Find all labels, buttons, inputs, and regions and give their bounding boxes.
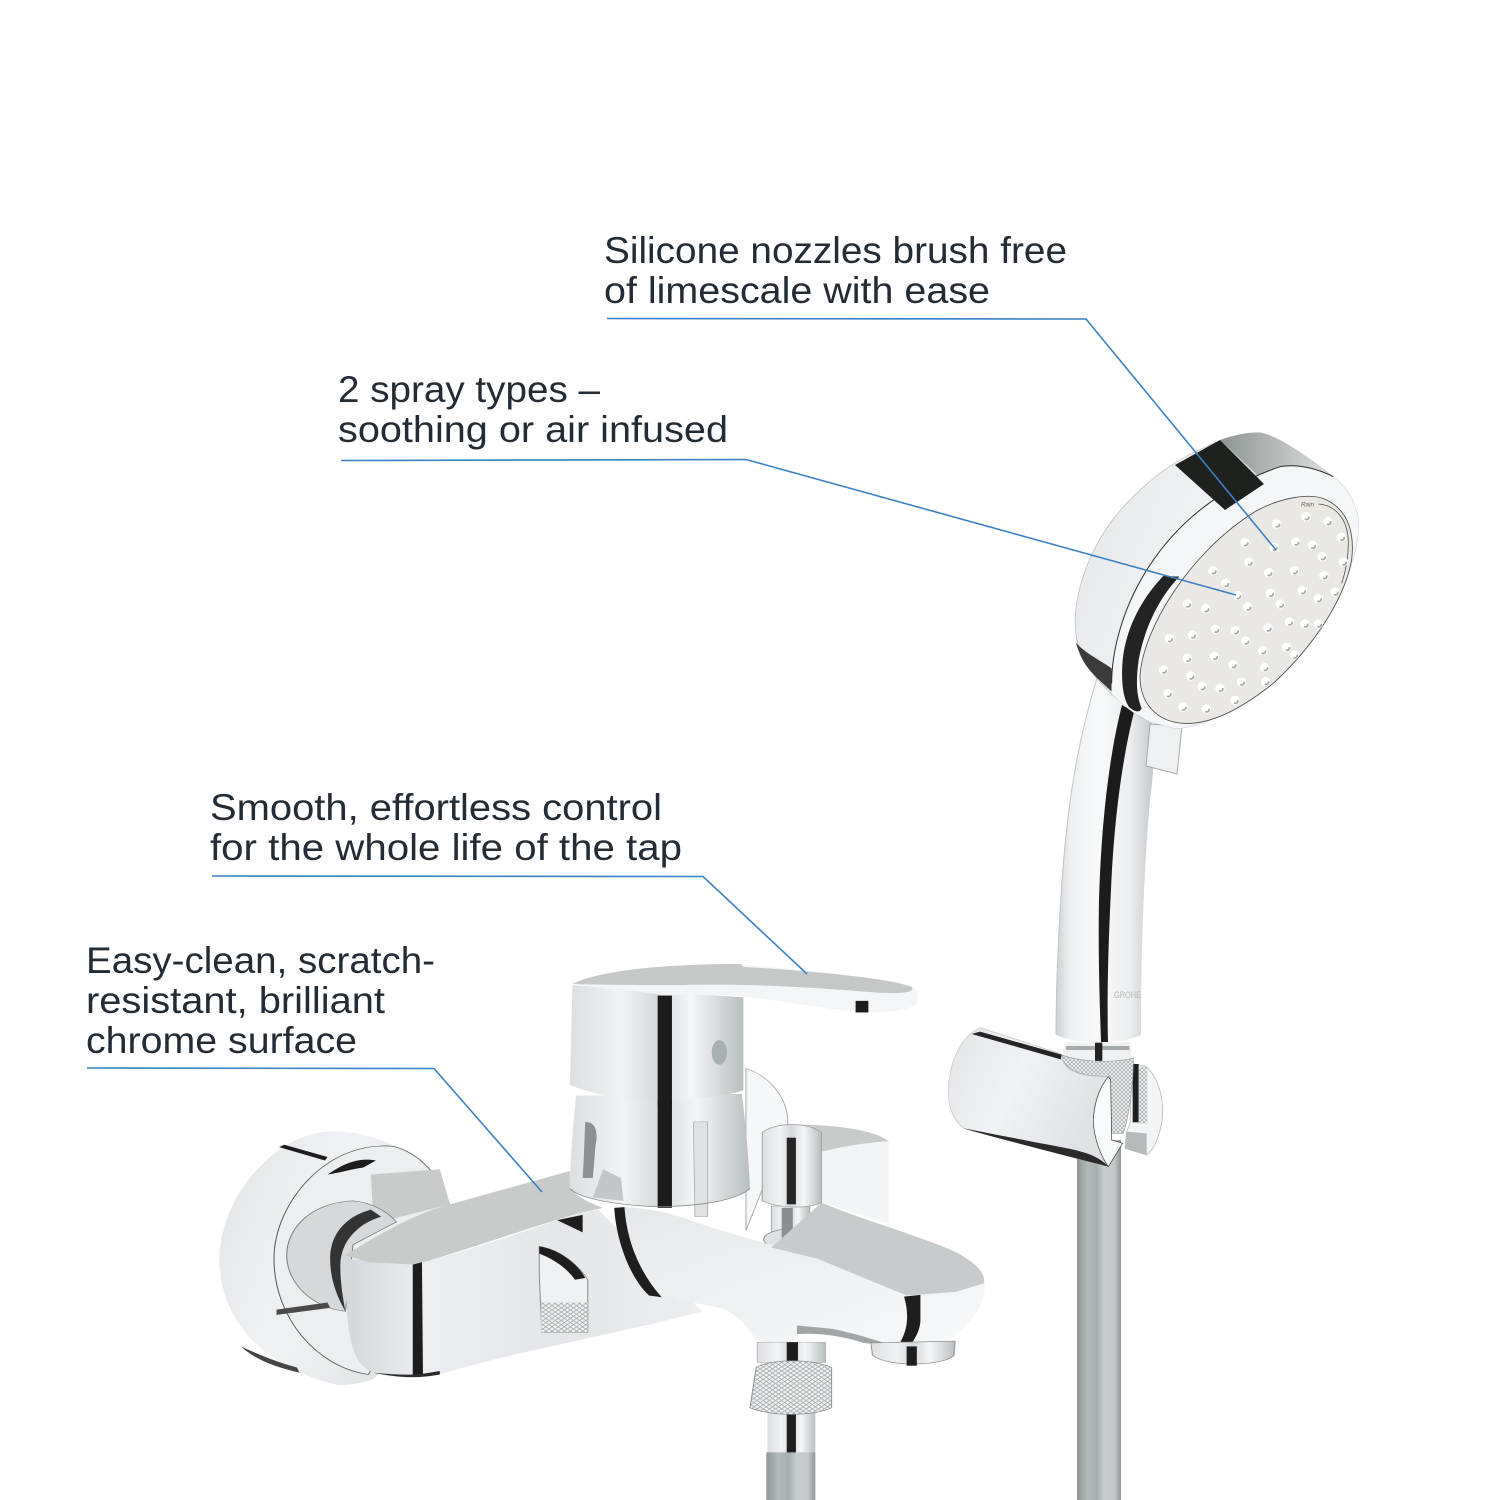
- leader line: chrome surface: [87, 1068, 542, 1192]
- leader line: spray types: [341, 460, 1236, 595]
- callout text: [338, 369, 728, 450]
- spray switch tab: [1146, 724, 1182, 774]
- callout text: Easy-clean, scratch-: [86, 940, 435, 981]
- callout: silicone nozzles: [604, 230, 1067, 311]
- callout text: [210, 787, 682, 868]
- holder top reflection: [972, 1032, 1062, 1059]
- callout text: Silicone nozzles brush free: [604, 230, 1067, 271]
- callout: chrome surface: [86, 940, 435, 1061]
- lower stem: [570, 1094, 750, 1217]
- callout text: resistant, brilliant: [86, 980, 386, 1021]
- leader line: smooth control: [212, 876, 807, 974]
- lower pipe: [539, 1246, 588, 1332]
- callout text: soothing or air infused: [338, 409, 728, 450]
- hand shower handle: [1056, 678, 1154, 1042]
- dark crescent: [1122, 576, 1179, 711]
- front ring: [1111, 466, 1359, 728]
- hose connector: [750, 1342, 832, 1500]
- black reflection band: [1175, 440, 1264, 510]
- lower shell reflection: [1076, 643, 1112, 692]
- wall flange: [219, 1131, 455, 1385]
- callout text: of limescale with ease: [604, 270, 990, 311]
- lever handle: [572, 964, 918, 1013]
- spray selector arc: [1318, 504, 1348, 583]
- callout: smooth control: [210, 787, 682, 868]
- shower head: [1075, 432, 1359, 728]
- lever cap: [570, 985, 743, 1105]
- leader line: silicone nozzles: [607, 318, 1276, 550]
- holder bottom reflection: [963, 1128, 1108, 1167]
- spout front: [617, 1208, 985, 1347]
- body black stripe: [413, 1262, 423, 1377]
- aerator: [871, 1341, 955, 1366]
- head shell: [1075, 433, 1359, 728]
- callout text: [604, 230, 1067, 311]
- spout top surface: [771, 1203, 984, 1296]
- spout: [614, 1203, 985, 1347]
- diverter knob: [762, 1125, 821, 1250]
- callout text: [86, 940, 435, 1061]
- lever top surface: [572, 964, 912, 993]
- callout text: chrome surface: [86, 1020, 357, 1061]
- wall holder: [948, 1028, 1163, 1167]
- sensor dot: [712, 1040, 727, 1065]
- diverter block: [787, 1125, 889, 1224]
- grey reflection band: [1220, 432, 1333, 482]
- back plate behind stem: [746, 1069, 788, 1231]
- holder back plate: [1125, 1063, 1163, 1155]
- shower hose: [1077, 1140, 1121, 1500]
- holder body: [948, 1028, 1108, 1167]
- callout text: for the whole life of the tap: [210, 827, 682, 868]
- body front: [345, 1210, 703, 1377]
- holder end cap: [1093, 1077, 1123, 1167]
- body knurl: [541, 1303, 588, 1332]
- bath tap: [219, 964, 985, 1500]
- spray label: Rain: [1301, 501, 1314, 508]
- callout text: 2 spray types –: [338, 369, 600, 410]
- nozzles: [1159, 512, 1348, 714]
- tap body: [345, 1171, 703, 1377]
- neck collar: [1062, 1043, 1132, 1060]
- knurled collar: [1062, 1055, 1133, 1133]
- body top surface: [345, 1171, 603, 1265]
- callout: spray types: [338, 369, 728, 450]
- spray face: [1140, 496, 1352, 723]
- spout tip reflection: [898, 1295, 920, 1347]
- logo on handle: GROHE: [1114, 990, 1141, 1000]
- callout text: Smooth, effortless control: [210, 787, 662, 828]
